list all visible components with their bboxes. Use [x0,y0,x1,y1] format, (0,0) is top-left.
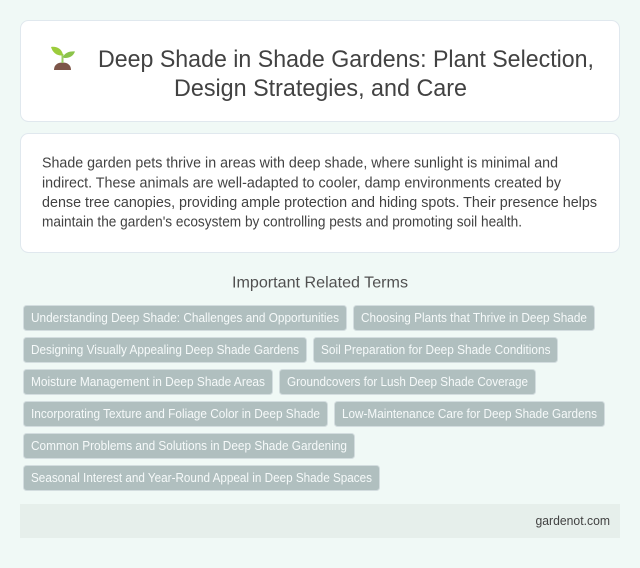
tag [354,306,594,330]
tag [24,306,346,330]
tag: Soil Preparation for Deep Shade Conditions [321,343,550,357]
panel: description [20,134,620,252]
tag [24,402,328,426]
tag: Incorporating Texture and Foliage Color in Deep Shade [31,407,320,421]
tag: Groundcovers for Lush Deep Shade Coverage [287,375,528,389]
tag: Moisture Management in Deep Shade Areas [31,375,265,389]
text block: description paragraph: indirect. These animals are well-adapted to cooler, damp environments created by [42,176,562,192]
text block: description paragraph: maintain the garden's ecosystem by controlling pests and promoting soil health. [42,214,522,230]
tag [334,402,604,426]
tag: Designing Visually Appealing Deep Shade Gardens [31,343,299,357]
footer [20,504,620,538]
tag [24,370,272,394]
tag: Understanding Deep Shade: Challenges and Opportunities [31,311,339,325]
text block: description paragraph [42,156,597,230]
title: Design Strategies, and Care [174,75,467,102]
panel: title card [20,20,620,122]
tag [280,370,536,394]
text block: description paragraph: Shade garden pets thrive in areas with deep shade, where sunlight is minimal and [42,156,558,172]
tag [24,338,306,362]
related terms tags [24,306,604,490]
tag: Seasonal Interest and Year-Round Appeal in Deep Shade Spaces [31,471,372,485]
tag [314,338,558,362]
tag: Common Problems and Solutions in Deep Shade Gardening [31,439,347,453]
title [98,46,594,102]
tag: Choosing Plants that Thrive in Deep Shade [361,311,587,325]
icon: seedling [51,47,75,70]
title: Deep Shade in Shade Gardens: Plant Selection, [98,46,594,73]
tag [24,434,354,458]
tag [24,466,380,490]
tag: Low-Maintenance Care for Deep Shade Gardens [342,407,597,421]
text block: description paragraph: dense tree canopies, providing ample protection and hiding spots. Their presence helps [42,195,597,211]
footer: gardenot.com [536,514,610,528]
heading: important related terms: Important Related Terms [232,274,408,292]
